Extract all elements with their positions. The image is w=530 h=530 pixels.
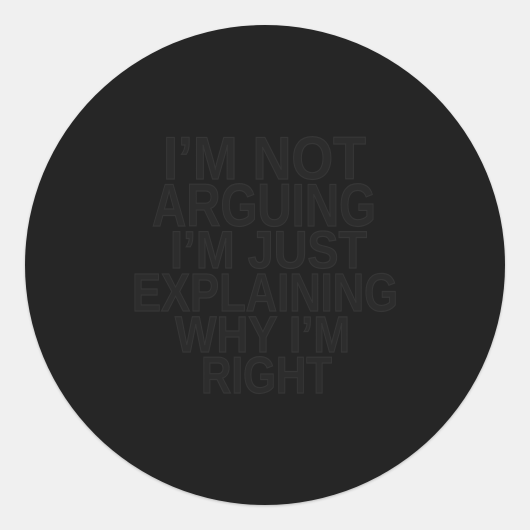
line: RIGHT: RIGHT (201, 347, 332, 405)
line: ARGUING: ARGUING (152, 172, 376, 239)
slogan text (132, 125, 398, 405)
line: I'M NOT: I’M NOT (163, 125, 366, 192)
line: I'M JUST: I’M JUST (170, 221, 367, 280)
line: WHY I'M: WHY I’M (175, 306, 350, 363)
line: EXPLAINING: EXPLAINING (132, 263, 398, 323)
